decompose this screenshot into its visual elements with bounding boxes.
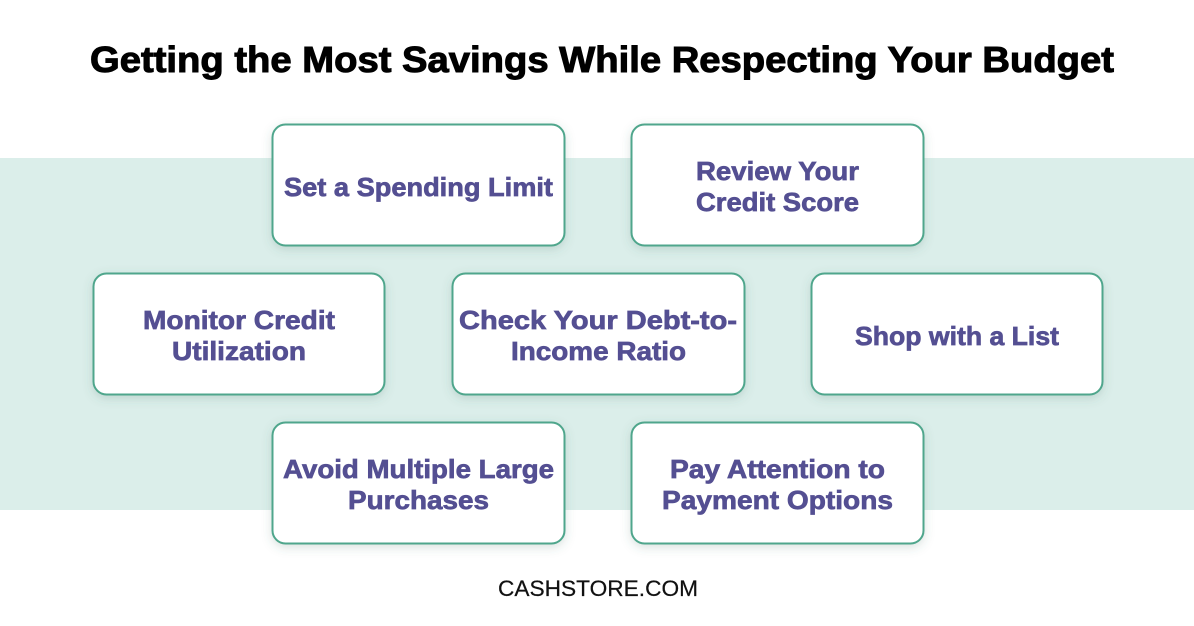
card: Shop with a List: Shop with a List <box>855 321 1059 351</box>
card: Monitor Credit Utilization: Monitor Credit <box>143 305 335 335</box>
background band <box>0 158 1194 510</box>
card: Set a Spending Limit <box>272 124 564 246</box>
card: Monitor Credit Utilization <box>94 274 384 394</box>
card: Pay Attention to Payment Options <box>632 422 924 544</box>
card: Avoid Multiple Large Purchases <box>272 422 564 544</box>
card: Avoid Multiple Large Purchases: Avoid Multiple Large <box>283 454 554 484</box>
card: Monitor Credit Utilization: Utilization <box>172 336 306 366</box>
card: Review Your Credit Score: Review Your <box>696 156 859 186</box>
footer brand: CASHSTORE.COM <box>498 576 698 601</box>
card: Avoid Multiple Large Purchases: Purchases <box>348 485 489 515</box>
card: Review Your Credit Score <box>632 124 924 246</box>
card: Check Your Debt-to-Income Ratio <box>452 274 744 394</box>
card: Check Your Debt-to-Income Ratio: Check Your Debt-to- <box>459 305 737 335</box>
card: Set a Spending Limit: Set a Spending Limit <box>284 172 553 202</box>
card: Review Your Credit Score: Credit Score <box>696 187 859 217</box>
title: Getting the Most Savings While Respecting Your Budget <box>90 39 1114 80</box>
card: Check Your Debt-to-Income Ratio: Income Ratio <box>511 336 686 366</box>
card: Shop with a List <box>812 274 1102 394</box>
card: Pay Attention to Payment Options: Payment Options <box>662 485 893 515</box>
card: Pay Attention to Payment Options: Pay Attention to <box>670 454 885 484</box>
